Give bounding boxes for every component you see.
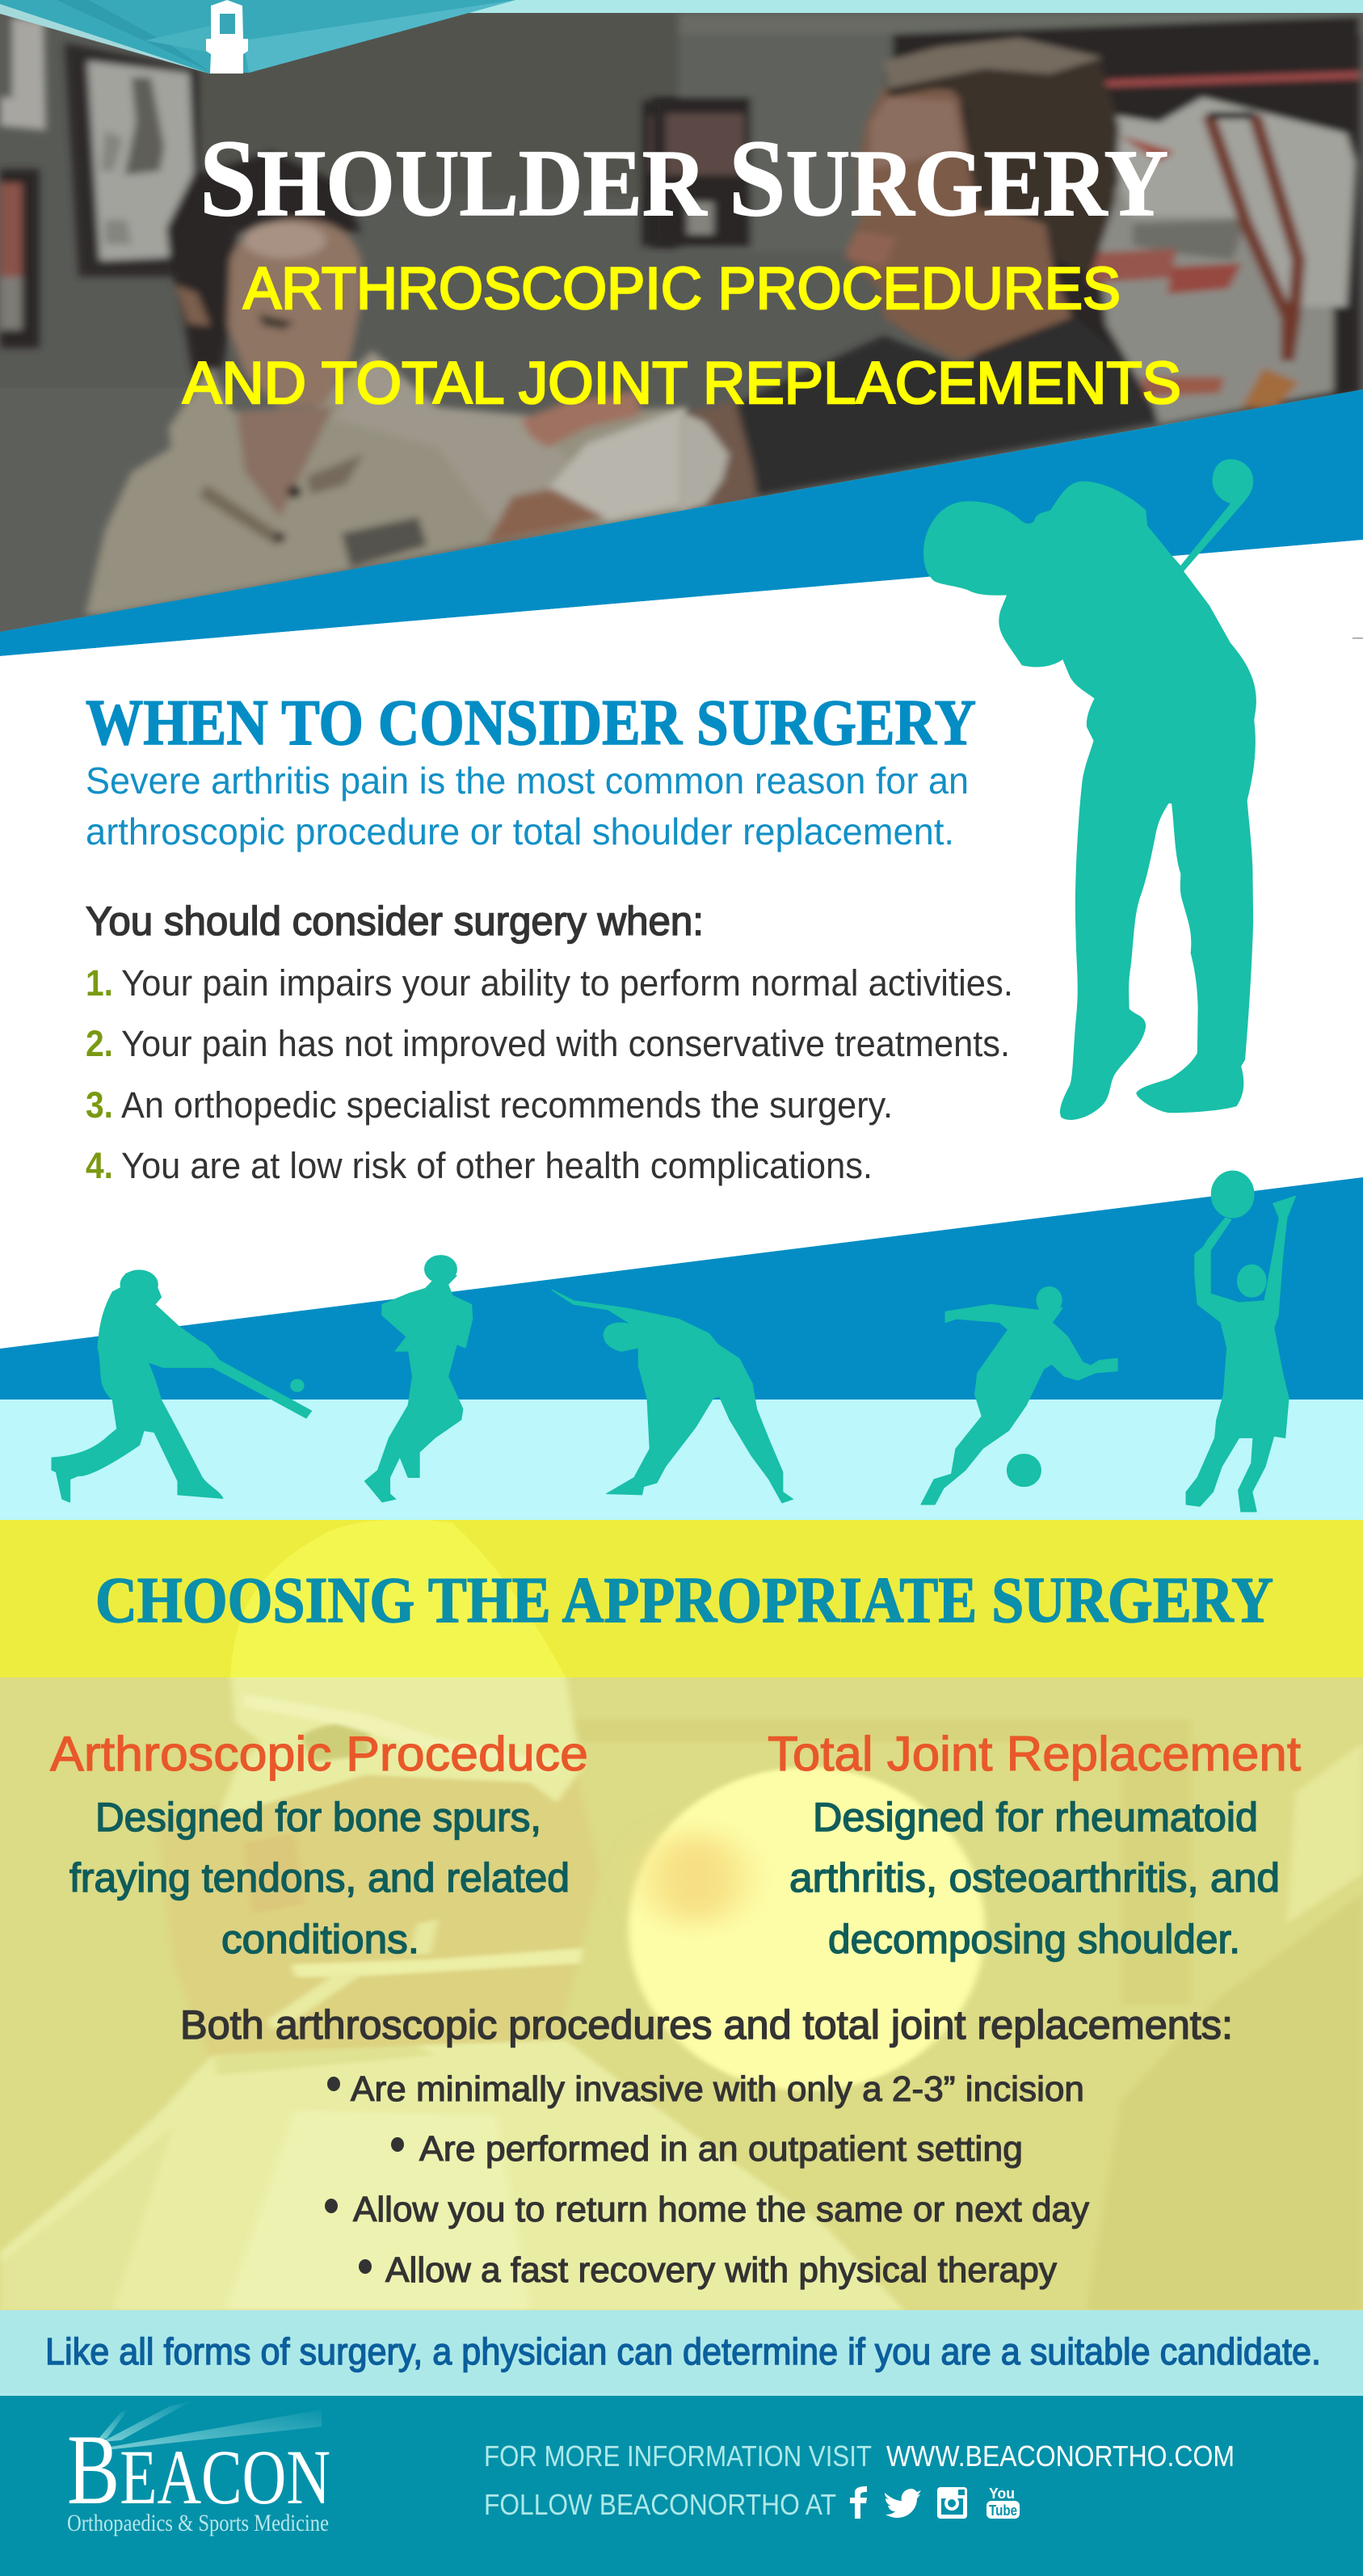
icon: golfer silhouette (923, 459, 1256, 1120)
footer panel (0, 2396, 1363, 2576)
icon: youtube: Tube (989, 2502, 1017, 2519)
subheading: you should consider surgery when: You should consider surgery when: (86, 899, 704, 944)
header photo: doctor examining patient shoulder (0, 0, 1363, 646)
title: SHOULDER SURGERY (200, 118, 1168, 239)
lower photo background: surgeon in yellow tint (0, 1671, 1363, 2310)
subtitle: AND TOTAL JOINT REPLACEMENTS (183, 351, 1181, 416)
list item 2: Your pain has not improved with conservative treatments. (121, 1023, 1010, 1064)
bullet 3: Allow you to return home the same or next day (353, 2190, 1089, 2229)
blue diagonal band (0, 389, 1363, 656)
icon: soccer player (921, 1286, 1117, 1505)
logo: Beacon Orthopaedics and Sports Medicine: BEACON (67, 2414, 330, 2525)
column body: arthritis, osteoarthritis, and (789, 1855, 1280, 1900)
pale cyan strip (0, 1400, 1363, 1520)
bullet 1: Are minimally invasive with only a 2-3” incision (351, 2069, 1084, 2109)
list item 1: 1. (86, 962, 113, 1004)
footer: more information line (484, 2439, 1235, 2473)
column: arthroscopic procedure (50, 1727, 588, 1962)
icon: runner (365, 1256, 472, 1502)
icon: twitter (885, 2489, 921, 2518)
intro text (86, 760, 969, 852)
list item 3: An orthopedic specialist recommends the surgery. (121, 1084, 893, 1126)
icon: stretching athlete (552, 1290, 793, 1503)
white panel background (0, 540, 1363, 1349)
footer: follow line: FOLLOW BEACONORTHO AT (484, 2488, 836, 2521)
icon: lighthouse (206, 0, 248, 74)
footer: more information line: WWW.BEACONORTHO.COM (886, 2439, 1235, 2473)
column body: decomposing shoulder. (828, 1917, 1240, 1962)
list item 3: 3. (86, 1084, 113, 1126)
column body: conditions. (221, 1917, 419, 1962)
column body (69, 1795, 570, 1962)
top pale bar (0, 0, 1363, 13)
column heading: Arthroscopic Proceduce (50, 1727, 588, 1781)
intro text: Severe arthritis pain is the most common reason for an (86, 760, 969, 802)
list item 4: You are at low risk of other health complications. (121, 1145, 873, 1186)
footer: more information line: FOR MORE INFORMATION VISIT (484, 2439, 872, 2473)
icon: baseball batter (53, 1270, 311, 1502)
subtitle (183, 256, 1181, 416)
callout band (0, 2310, 1363, 2396)
column body: Designed for rheumatoid (813, 1795, 1258, 1840)
numbered list (86, 962, 1013, 1186)
icon: youtube: You (989, 2486, 1015, 2502)
lower blue diagonal band (0, 1177, 1363, 1400)
bullet 4: Allow a fast recovery with physical therapy (385, 2250, 1057, 2290)
intro text: arthroscopic procedure or total shoulder replacement. (86, 810, 954, 852)
bullet list (325, 2069, 1089, 2290)
subheading: both procedures: Both arthroscopic procedures and total joint replacements: (180, 2002, 1233, 2048)
list item 4: 4. (86, 1145, 113, 1186)
column body (789, 1795, 1280, 1962)
bullet 2: Are performed in an outpatient setting (419, 2129, 1023, 2169)
logo: Beacon Orthopaedics and Sports Medicine: Orthopaedics & Sports Medicine (67, 2510, 329, 2536)
column heading: Total Joint Replacement (768, 1727, 1301, 1781)
column body: Designed for bone spurs, (95, 1795, 541, 1840)
logo: Beacon Orthopaedics and Sports Medicine (67, 2401, 330, 2536)
icon: facebook (850, 2486, 867, 2519)
column: total joint replacement (768, 1727, 1301, 1962)
list item 2: 2. (86, 1023, 113, 1064)
icon: instagram (937, 2487, 967, 2519)
heading: when to consider surgery: WHEN TO CONSIDER SURGERY (86, 688, 976, 759)
yellow band behind section heading (0, 1519, 1363, 1677)
logo banner with lighthouse (0, 0, 515, 74)
icon: tennis player (1187, 1171, 1295, 1512)
column body: fraying tendons, and related (69, 1855, 570, 1900)
subtitle: ARTHROSCOPIC PROCEDURES (243, 256, 1121, 322)
sports silhouettes row (53, 1171, 1295, 1512)
list item 1: Your pain impairs your ability to perform normal activities. (121, 962, 1013, 1004)
icon: youtube (986, 2486, 1020, 2519)
